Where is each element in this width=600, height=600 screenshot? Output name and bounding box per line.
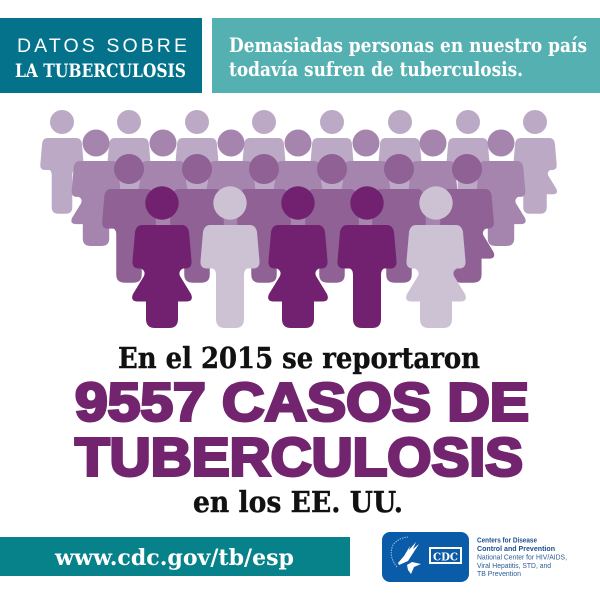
front figure 1: dark woman (132, 186, 192, 328)
front figure 5: light woman (406, 186, 466, 328)
website bar: www.cdc.gov/tb/esp (54, 545, 294, 571)
CDC organisation text: National Center for HIV/AIDS, (477, 552, 567, 562)
icon: HHS eagle emblem (391, 537, 421, 574)
crowd of people figures (40, 110, 557, 328)
second row of figures (71, 130, 526, 246)
header panel: demasiadas personas: todavía sufren de tuberculosis. (229, 58, 523, 81)
CDC logo (382, 532, 469, 582)
CDC organisation text: Control and Prevention (477, 544, 555, 553)
header panel: datos sobre la tuberculosis: LA TUBERCULOSIS (15, 60, 186, 82)
CDC organisation text: Centers for Disease (477, 536, 537, 544)
CDC box: CDC (433, 550, 458, 564)
text: en el 2015 se reportaron: En el 2015 se reportaron (118, 341, 480, 375)
headline number: 9557 casos de: 9557 CASOS DE (75, 374, 529, 432)
CDC organisation text: Viral Hepatitis, STD, and (477, 561, 551, 570)
front row of figures (132, 186, 466, 328)
third row of figures (102, 154, 494, 283)
front figure 4: dark man (337, 186, 397, 328)
CDC organisation text: TB Prevention (477, 569, 521, 578)
text: en los EE. UU.: en los EE. UU. (193, 485, 403, 519)
header panel: demasiadas personas (212, 18, 600, 93)
header panel: datos sobre la tuberculosis (0, 18, 202, 93)
CDC organisation text (477, 536, 567, 578)
front figure 2: light man (200, 186, 260, 328)
back row of figures (40, 110, 557, 214)
headline: tuberculosis: TUBERCULOSIS (75, 428, 523, 488)
front figure 3: dark woman (268, 186, 328, 328)
website bar (0, 537, 350, 576)
header panel: datos sobre la tuberculosis: DATOS SOBRE (17, 35, 187, 57)
